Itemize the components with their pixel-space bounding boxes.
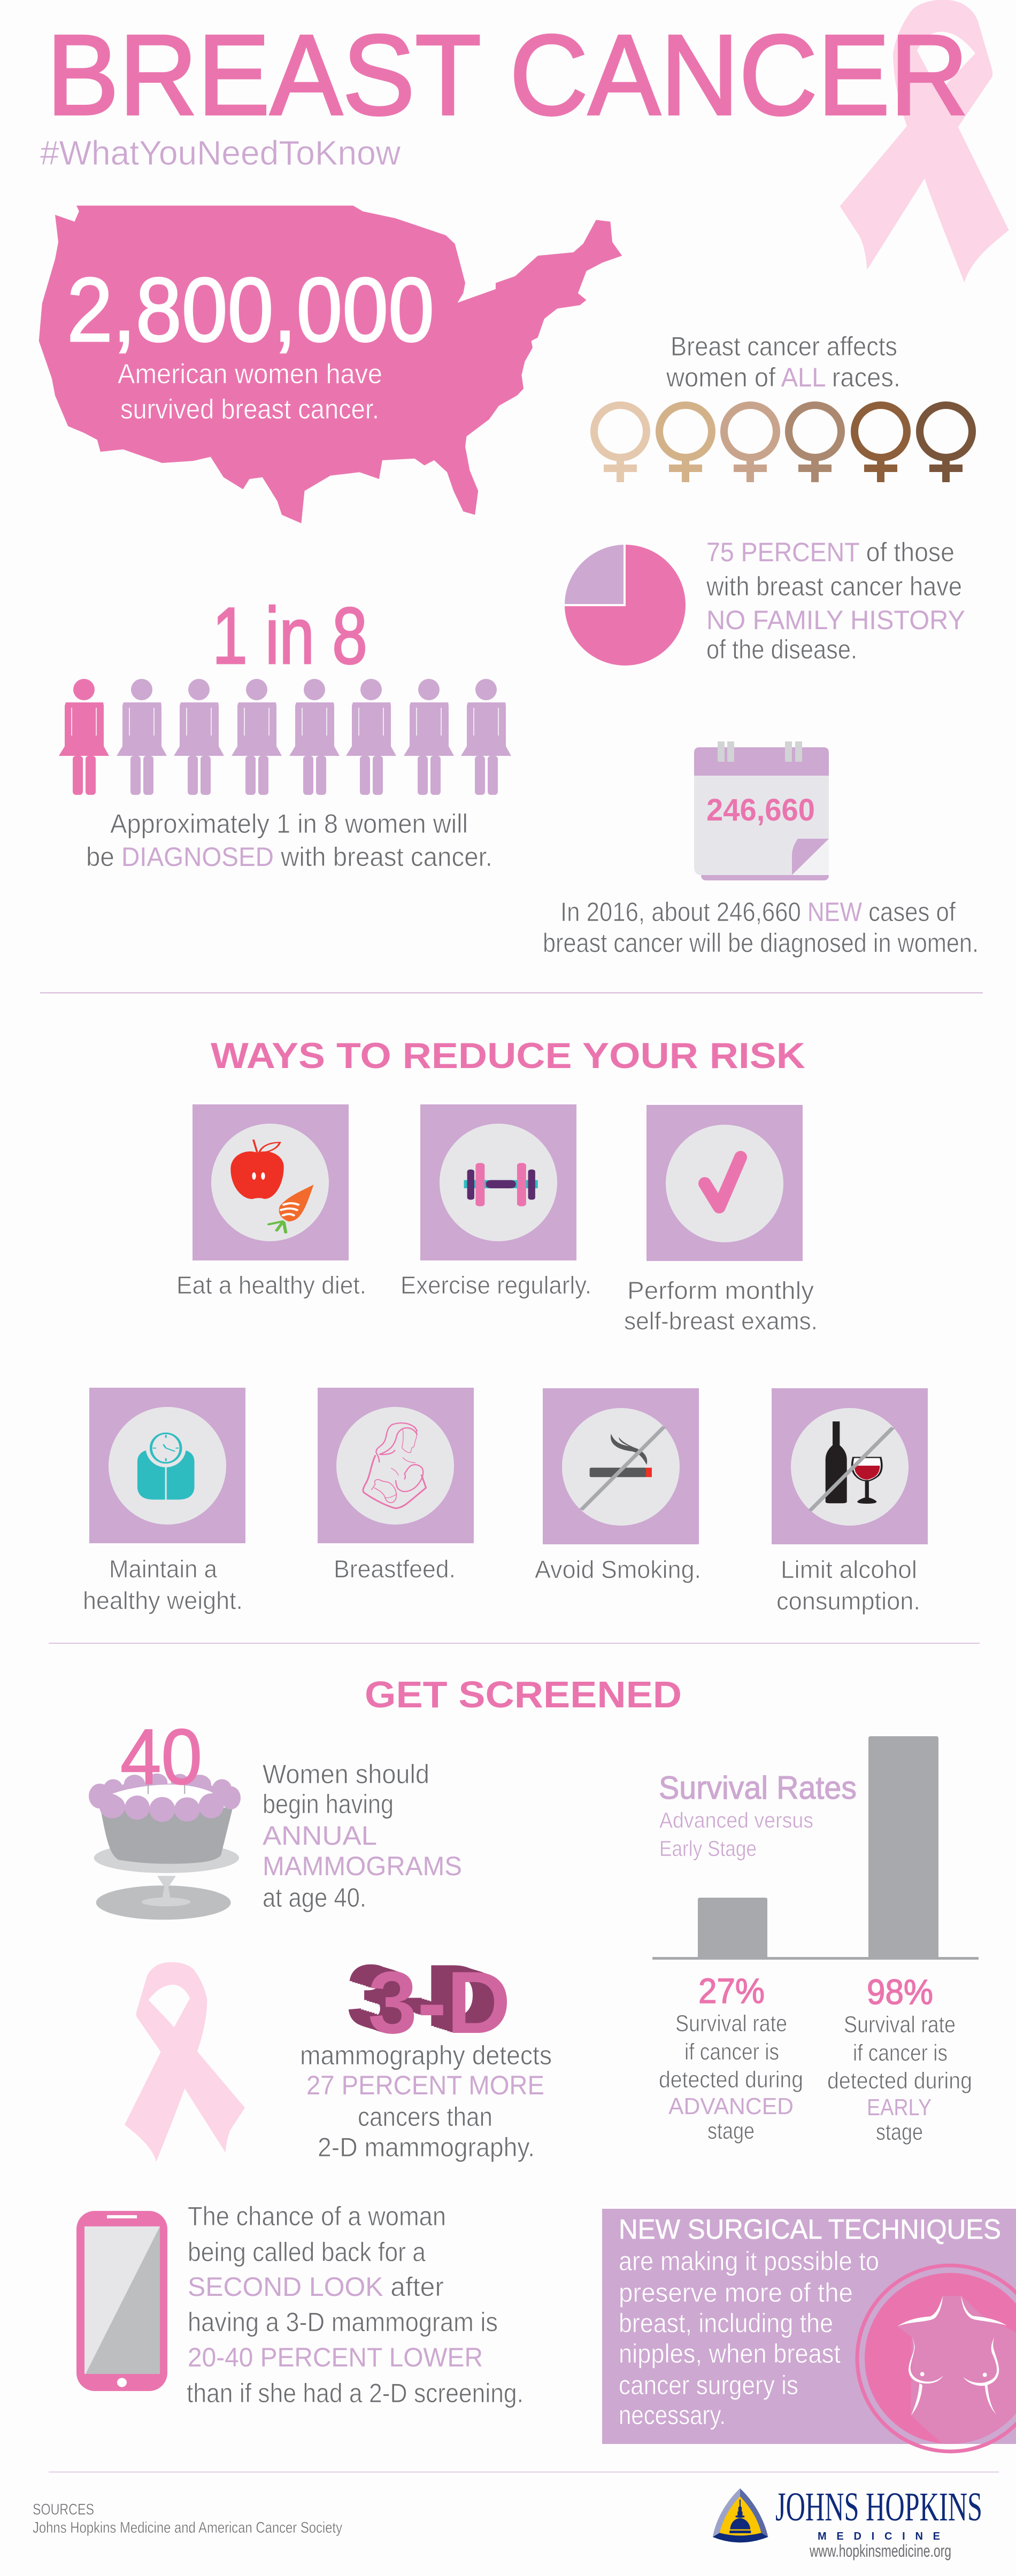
1 in 8 caption: be DIAGNOSED with breast cancer. bbox=[86, 842, 492, 872]
website: www.hopkinsmedicine.org bbox=[809, 2541, 951, 2560]
advanced stage column: 27% bbox=[698, 1971, 765, 2010]
early stage column: EARLY bbox=[867, 2094, 932, 2121]
advanced stage column: ADVANCED bbox=[668, 2093, 794, 2119]
races text: Breast cancer affects bbox=[671, 331, 897, 361]
new cases text bbox=[543, 897, 979, 958]
family history text: NO FAMILY HISTORY bbox=[706, 605, 965, 635]
caption: consumption. bbox=[776, 1587, 920, 1615]
mammogram text: begin having bbox=[263, 1789, 394, 1819]
caption: Perform monthly bbox=[627, 1277, 814, 1304]
caption bbox=[776, 1556, 920, 1615]
advanced stage column: Survival rate bbox=[675, 2010, 787, 2037]
icon: smartphone bbox=[76, 2211, 167, 2391]
early stage column: 98% bbox=[867, 1972, 933, 2012]
survival heading: Early Stage bbox=[659, 1836, 757, 1861]
box background bbox=[602, 2209, 1016, 2444]
mammogram text: at age 40. bbox=[263, 1883, 366, 1913]
surgical heading: NEW SURGICAL TECHNIQUES bbox=[619, 2214, 1001, 2245]
medicine label: MEDICINE bbox=[818, 2531, 940, 2542]
sources: SOURCES bbox=[33, 2501, 94, 2518]
survival heading bbox=[659, 1770, 857, 1861]
early stage column: stage bbox=[876, 2119, 923, 2145]
hashtag subtitle: #WhatYouNeedToKnow bbox=[40, 134, 401, 172]
tile with check mark bbox=[646, 1105, 803, 1261]
survivor caption: survived breast cancer. bbox=[120, 394, 379, 425]
tile with crossed out wine bbox=[772, 1388, 928, 1544]
panel: self exams bbox=[624, 1105, 818, 1335]
caption: Exercise regularly. bbox=[401, 1271, 591, 1299]
races text: women of ALL races. bbox=[666, 362, 900, 392]
surgical text: nipples, when breast bbox=[619, 2339, 841, 2369]
second look text: 20-40 PERCENT LOWER bbox=[188, 2342, 483, 2372]
caption: Limit alcohol bbox=[781, 1556, 917, 1583]
tile with crossed out cigarette bbox=[543, 1388, 699, 1544]
bar chart bbox=[652, 1736, 979, 1960]
panel: USA map survivors bbox=[39, 206, 622, 523]
mammogram text bbox=[263, 1759, 462, 1913]
icon: birthday cake on stand bbox=[89, 1713, 241, 1920]
surgical text: preserve more of the bbox=[619, 2278, 853, 2308]
advanced stage column: if cancer is bbox=[684, 2039, 779, 2065]
panel: avoid smoking bbox=[535, 1388, 701, 1583]
second look text bbox=[187, 2201, 524, 2408]
caption: Breastfeed. bbox=[334, 1555, 456, 1583]
second look text: than if she had a 2-D screening. bbox=[187, 2378, 524, 2408]
pie chart bbox=[565, 545, 686, 666]
icon: pink ribbon top right bbox=[840, 0, 1009, 283]
3-D caption: cancers than bbox=[358, 2102, 492, 2132]
tile with dumbbell bbox=[420, 1104, 576, 1260]
mammogram text: ANNUAL bbox=[263, 1821, 377, 1851]
surgical text: cancer surgery is bbox=[619, 2370, 798, 2400]
3-D caption: 27 PERCENT MORE bbox=[306, 2070, 544, 2100]
panel: new surgical techniques bbox=[602, 2209, 1016, 2470]
panel: all races bbox=[594, 331, 972, 482]
3-D caption: 2-D mammography. bbox=[318, 2132, 535, 2162]
survivor caption: American women have bbox=[118, 359, 382, 390]
tile with scale bbox=[89, 1388, 245, 1543]
second look text: The chance of a woman bbox=[188, 2201, 446, 2231]
second look text: being called back for a bbox=[188, 2237, 426, 2267]
surgical text: are making it possible to bbox=[619, 2246, 879, 2276]
tile with apple and carrot bbox=[193, 1104, 349, 1260]
survivor count: 2,800,000 bbox=[67, 259, 434, 361]
second look text: SECOND LOOK after bbox=[188, 2272, 444, 2302]
icon: six female symbols bbox=[594, 405, 972, 482]
survival heading: Survival Rates bbox=[659, 1770, 857, 1806]
panel: healthy diet bbox=[176, 1104, 366, 1299]
caption: Maintain a bbox=[109, 1555, 217, 1583]
races text bbox=[666, 331, 900, 392]
panel: exercise bbox=[401, 1104, 591, 1299]
icon: shield with dome bbox=[713, 2488, 768, 2542]
surgical text bbox=[619, 2246, 879, 2430]
second look text: having a 3-D mammogram is bbox=[188, 2307, 498, 2337]
icon: row of eight women bbox=[59, 679, 511, 795]
mammogram text: MAMMOGRAMS bbox=[263, 1851, 462, 1881]
caption: healthy weight. bbox=[83, 1587, 243, 1614]
stat 1 in 8: 1 in 8 bbox=[212, 591, 367, 680]
survivor caption bbox=[118, 359, 382, 425]
family history text: 75 PERCENT of those bbox=[706, 537, 955, 567]
early stage column: detected during bbox=[827, 2068, 972, 2094]
advanced stage column: detected during bbox=[659, 2067, 803, 2093]
title: BREAST CANCER bbox=[47, 11, 968, 139]
panel: 1 in 8 bbox=[59, 591, 511, 872]
advanced stage column: stage bbox=[707, 2118, 755, 2144]
family history text bbox=[706, 537, 965, 664]
3-D extruded text: 3-D bbox=[368, 1953, 511, 2052]
panel: 246,660 new cases bbox=[543, 741, 979, 958]
panel: 75 percent family history bbox=[565, 537, 965, 666]
mammogram text: Women should bbox=[263, 1759, 429, 1789]
caption bbox=[83, 1555, 243, 1614]
icon: torso in circle bbox=[857, 2265, 1016, 2470]
sources: Johns Hopkins Medicine and American Cancer Society bbox=[33, 2519, 342, 2536]
1 in 8 caption bbox=[86, 809, 492, 872]
early stage column: Survival rate bbox=[844, 2012, 956, 2038]
3-D caption: mammography detects bbox=[300, 2040, 552, 2070]
heading: get screened: GET SCREENED bbox=[365, 1674, 682, 1715]
icon: calendar bbox=[694, 741, 829, 880]
map of USA bbox=[39, 206, 622, 523]
number 40: 40 bbox=[120, 1713, 202, 1801]
panel: age 40 mammograms bbox=[89, 1713, 462, 1920]
heading: ways to reduce your risk: WAYS TO REDUCE YOUR RISK bbox=[211, 1035, 805, 1076]
sources bbox=[33, 2501, 342, 2536]
calendar number: 246,660 bbox=[706, 793, 815, 827]
caption: Avoid Smoking. bbox=[535, 1556, 701, 1583]
caption: Eat a healthy diet. bbox=[176, 1271, 366, 1299]
surgical text: necessary. bbox=[619, 2400, 726, 2430]
surgical text: breast, including the bbox=[619, 2308, 833, 2338]
panel: breastfeed bbox=[318, 1388, 474, 1583]
tile with mother and baby bbox=[318, 1388, 474, 1543]
family history text: with breast cancer have bbox=[706, 571, 962, 601]
early stage column bbox=[827, 1972, 972, 2145]
logo: Johns Hopkins Medicine bbox=[713, 2485, 982, 2560]
family history text: of the disease. bbox=[706, 635, 857, 664]
advanced stage column bbox=[659, 1971, 803, 2144]
panel: healthy weight bbox=[83, 1388, 245, 1614]
new cases text: In 2016, about 246,660 NEW cases of bbox=[560, 897, 956, 927]
icon: pink ribbon lower left bbox=[125, 1962, 245, 2162]
panel: 3-D mammography bbox=[300, 1953, 552, 2162]
panel: limit alcohol bbox=[772, 1388, 928, 1615]
caption bbox=[624, 1277, 818, 1335]
panel: survival rates bbox=[652, 1736, 979, 2145]
3-D caption bbox=[300, 2040, 552, 2162]
1 in 8 caption: Approximately 1 in 8 women will bbox=[110, 809, 468, 839]
early stage column: if cancer is bbox=[853, 2040, 948, 2066]
survival heading: Advanced versus bbox=[659, 1808, 813, 1832]
panel: second look bbox=[76, 2201, 524, 2408]
caption: self-breast exams. bbox=[624, 1307, 818, 1335]
